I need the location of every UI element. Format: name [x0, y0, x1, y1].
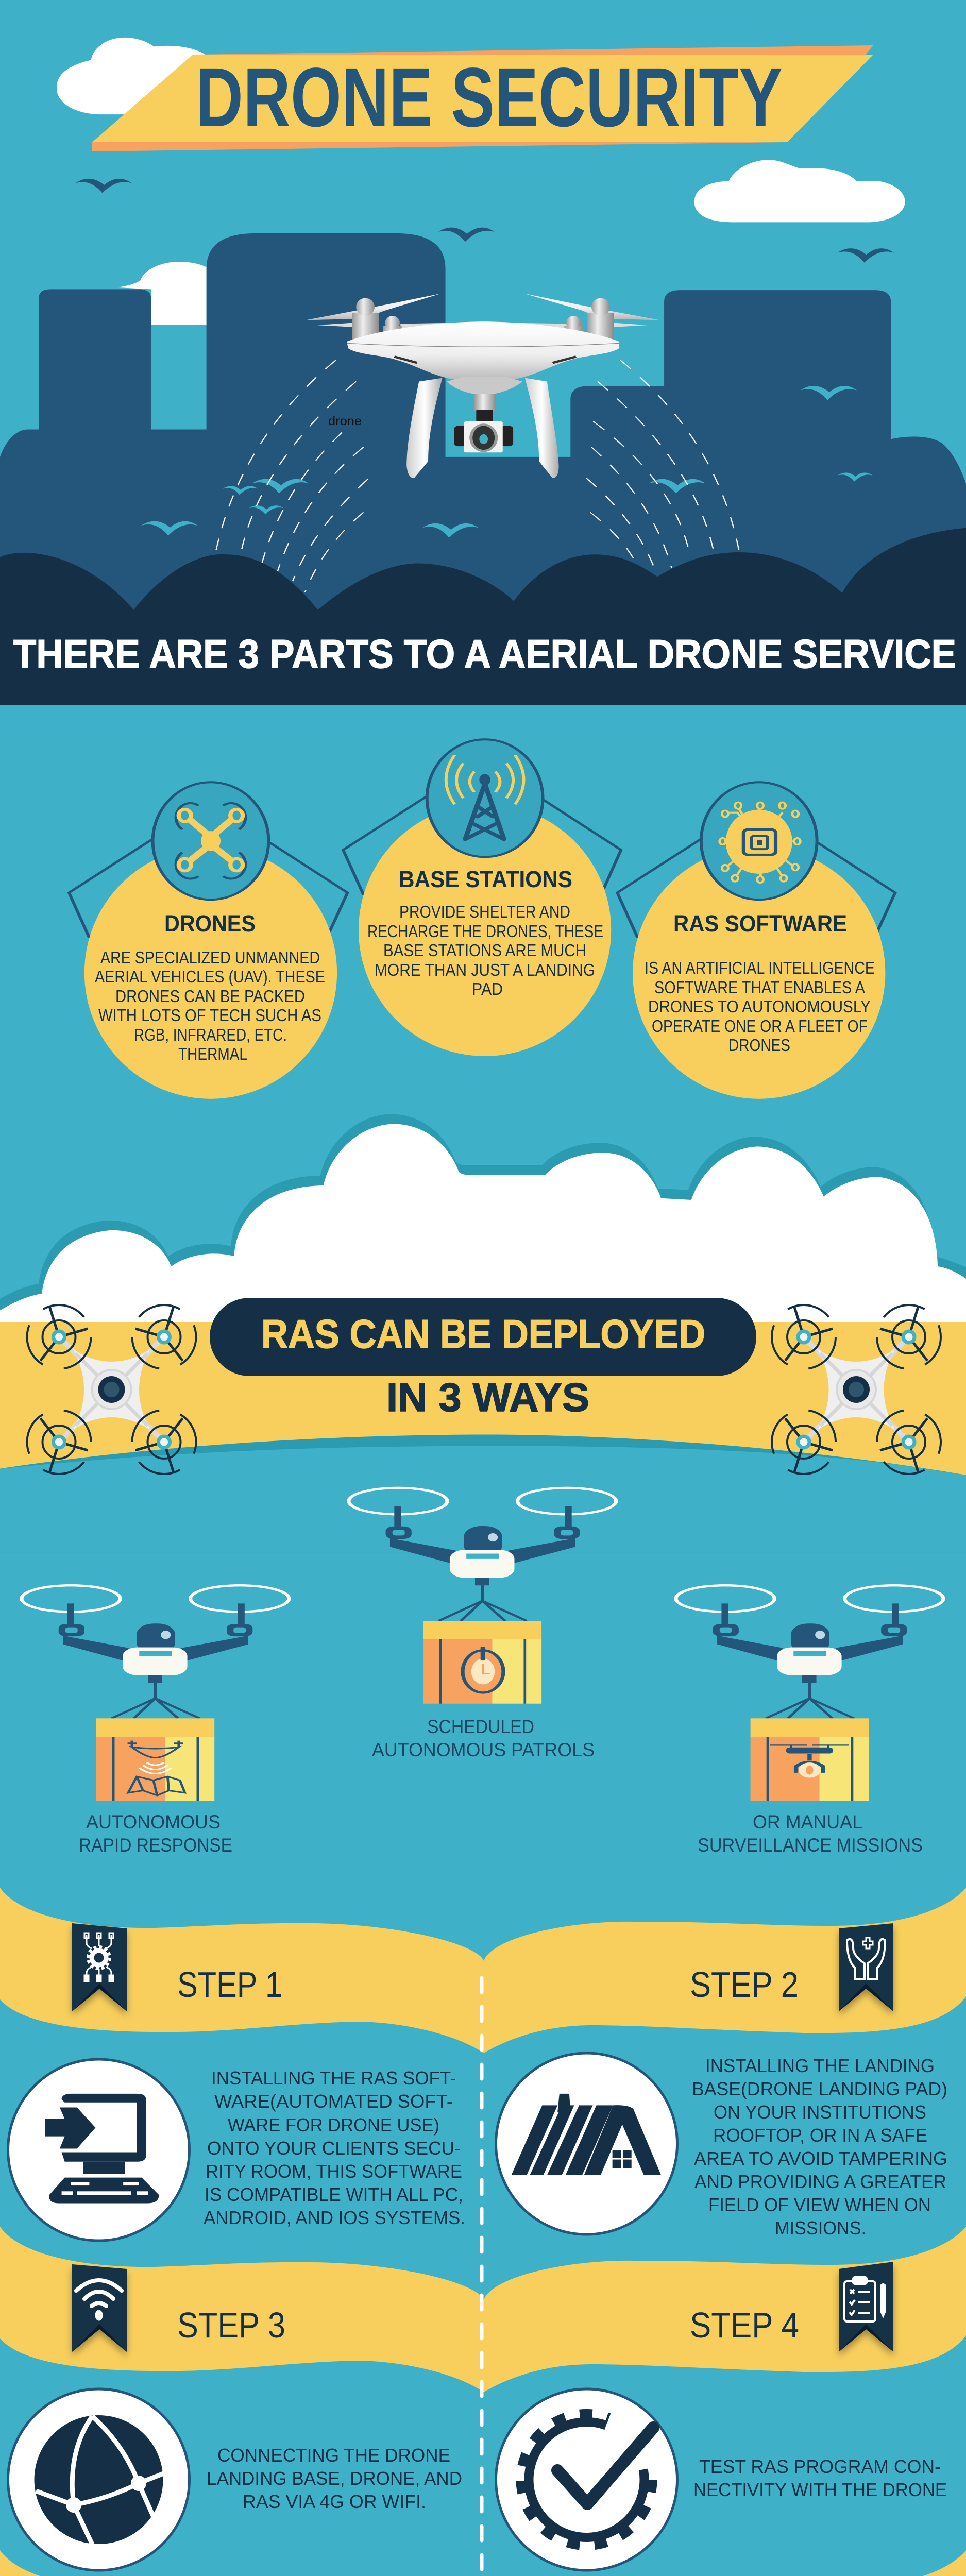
body: step 2: AREA TO AVOID TAMPERING	[694, 2148, 947, 2169]
body: step 1: ONTO YOUR CLIENTS SECU-	[207, 2138, 461, 2159]
body: step 1	[204, 2067, 465, 2228]
body: step 2: AND PROVIDING A GREATER	[694, 2171, 946, 2192]
icon: tower	[427, 739, 543, 857]
body: ras software: DRONES	[728, 1036, 790, 1055]
label: autonomous rapid response: AUTONOMOUS	[86, 1811, 221, 1833]
body: step 2	[692, 2055, 947, 2239]
body: base stations: MORE THAN JUST A LANDING	[375, 960, 595, 979]
icon: top-view drone left	[27, 1305, 196, 1474]
icon: power clock	[463, 1647, 503, 1692]
icon circle: network globe	[8, 2389, 190, 2570]
body: step 1: ANDROID, AND IOS SYSTEMS.	[204, 2207, 465, 2228]
foreground hills	[0, 528, 966, 692]
drone: scheduled patrols	[349, 1488, 616, 1704]
body: step 3: LANDING BASE, DRONE, AND	[207, 2468, 462, 2489]
card graphics	[69, 739, 895, 1099]
drone: manual surveillance	[676, 1585, 943, 1801]
body: step 2: ROOFTOP, OR IN A SAFE	[713, 2125, 927, 2146]
body: base stations: BASE STATIONS ARE MUCH	[383, 941, 586, 960]
body: ras software	[645, 958, 875, 1055]
panel: step 3	[8, 2264, 462, 2570]
ribbon: steps 3 and 4	[0, 2227, 966, 2392]
bookmark: step 1	[72, 1923, 127, 2011]
bookmark: step 3	[72, 2264, 127, 2352]
title: DRONE SECURITY	[196, 50, 783, 144]
birds: teal	[141, 386, 873, 538]
label: step 3: STEP 3	[177, 2305, 285, 2345]
outlines	[69, 796, 895, 938]
card: ras software	[645, 910, 875, 1055]
yellow circles	[84, 804, 885, 1099]
icon: hands	[847, 1938, 885, 1979]
body: step 4	[693, 2456, 947, 2500]
quadcopter	[305, 294, 661, 478]
big cloud	[0, 1114, 966, 1353]
body: drones: RGB, INFRARED, ETC.	[134, 1025, 287, 1044]
body: ras software: OPERATE ONE OR A FLEET OF	[652, 1016, 868, 1036]
icon: clipboard	[844, 2277, 886, 2321]
icon: gear circuit	[84, 1933, 113, 1981]
navy band	[0, 644, 966, 705]
label: scheduled autonomous patrols	[372, 1716, 595, 1760]
bookmark: step 4	[839, 2262, 893, 2352]
panel: three parts	[69, 739, 895, 1099]
body: drones: ARE SPECIALIZED UNMANNED	[100, 948, 320, 967]
icon circle: landing base roof	[496, 2053, 677, 2234]
body: drones: DRONES CAN BE PACKED	[115, 987, 305, 1006]
cloud: behind banner	[57, 38, 210, 114]
body: base stations	[367, 902, 603, 998]
drone: autonomous rapid response	[22, 1585, 289, 1801]
label: step 4: STEP 4	[690, 2305, 799, 2345]
label: manual surveillance missions	[698, 1811, 923, 1856]
heading: ras can be deployed: RAS CAN BE DEPLOYED	[261, 1311, 705, 1357]
panel: ras deployment	[0, 1298, 966, 1856]
label: manual surveillance missions: SURVEILLANCE MISSIONS	[698, 1835, 923, 1856]
icon circle: software install	[8, 2059, 190, 2241]
body: step 3: CONNECTING THE DRONE	[217, 2445, 450, 2466]
label: autonomous rapid response	[79, 1811, 232, 1856]
scene illustration	[0, 38, 966, 692]
body: drones: THERMAL	[178, 1044, 247, 1063]
body: ras software: SOFTWARE THAT ENABLES A	[654, 978, 865, 997]
ribbon: steps 5 and 6	[0, 2550, 966, 2576]
label: autonomous rapid response: RAPID RESPONSE	[79, 1835, 232, 1856]
icon: drone	[153, 782, 268, 900]
panel: hero scene	[0, 38, 966, 705]
body: ras software: IS AN ARTIFICIAL INTELLIGENCE	[645, 958, 875, 977]
title banner	[92, 45, 873, 151]
card: base stations	[367, 866, 603, 998]
yellow band	[0, 1322, 966, 1552]
birds: dark	[75, 179, 894, 263]
city skyline	[0, 233, 966, 692]
body: step 2: ON YOUR INSTITUTIONS	[714, 2102, 926, 2123]
body: drones: AERIAL VEHICLES (UAV). THESE	[95, 967, 325, 986]
icon: top-view drone right	[772, 1305, 941, 1474]
cloud: right	[694, 160, 905, 222]
heading pill	[210, 1298, 756, 1376]
banner orange edges	[92, 45, 873, 151]
icon: drone and map	[128, 1741, 185, 1795]
body: step 1: RITY ROOM, THIS SOFTWARE	[206, 2161, 462, 2182]
panel: step 4	[496, 2262, 947, 2570]
body: base stations: RECHARGE THE DRONES, THESE	[367, 922, 603, 941]
body: base stations: PAD	[472, 979, 503, 998]
banner yellow	[92, 55, 873, 142]
heading: base stations: BASE STATIONS	[399, 866, 572, 892]
body: base stations: PROVIDE SHELTER AND	[399, 902, 570, 921]
body: step 1: WARE FOR DRONE USE)	[228, 2114, 439, 2136]
label: step 2: STEP 2	[690, 1964, 799, 2005]
body: step 3: RAS VIA 4G OR WIFI.	[243, 2491, 426, 2512]
body: step 3	[207, 2445, 462, 2512]
signal arcs	[216, 360, 739, 592]
panel: step 1	[8, 1923, 465, 2241]
body: step 1: WARE(AUTOMATED SOFT-	[214, 2091, 453, 2112]
label: scheduled autonomous patrols: AUTONOMOUS PATROLS	[372, 1739, 595, 1760]
icon circle: gear check	[496, 2389, 677, 2570]
body: step 2: INSTALLING THE LANDING	[705, 2055, 935, 2076]
label: manual surveillance missions: OR MANUAL	[753, 1811, 862, 1833]
body: step 4: TEST RAS PROGRAM CON-	[699, 2456, 941, 2477]
body: step 4: NECTIVITY WITH THE DRONE	[693, 2479, 947, 2500]
body: step 2: BASE(DRONE LANDING PAD)	[692, 2078, 947, 2099]
icon: ai chip	[701, 782, 817, 900]
bookmark: step 2	[839, 1923, 893, 2011]
body: step 2: MISSIONS.	[775, 2217, 866, 2239]
icon: wifi	[76, 2280, 122, 2320]
body: step 2: FIELD OF VIEW WHEN ON	[708, 2194, 931, 2215]
body: drones	[95, 948, 325, 1063]
stray label: drone: drone	[328, 414, 362, 428]
heading: in 3 ways: IN 3 WAYS	[386, 1375, 589, 1420]
icon: drone with eye	[770, 1745, 849, 1777]
card: drones	[95, 910, 325, 1063]
panel: step 2	[496, 1923, 947, 2239]
label: scheduled autonomous patrols: SCHEDULED	[427, 1716, 534, 1737]
body: ras software: DRONES TO AUTONOMOUSLY	[648, 997, 871, 1016]
body: drones: WITH LOTS OF TECH SUCH AS	[98, 1006, 321, 1025]
ribbon: steps 1 and 2	[0, 1888, 966, 2053]
body: step 1: INSTALLING THE RAS SOFT-	[211, 2067, 456, 2089]
body: step 1: IS COMPATIBLE WITH ALL PC,	[205, 2184, 463, 2205]
label: step 1: STEP 1	[177, 1964, 282, 2005]
heading: ras software: RAS SOFTWARE	[673, 910, 847, 937]
heading: drones: DRONES	[164, 910, 256, 937]
cloud: behind buildings	[117, 262, 210, 325]
